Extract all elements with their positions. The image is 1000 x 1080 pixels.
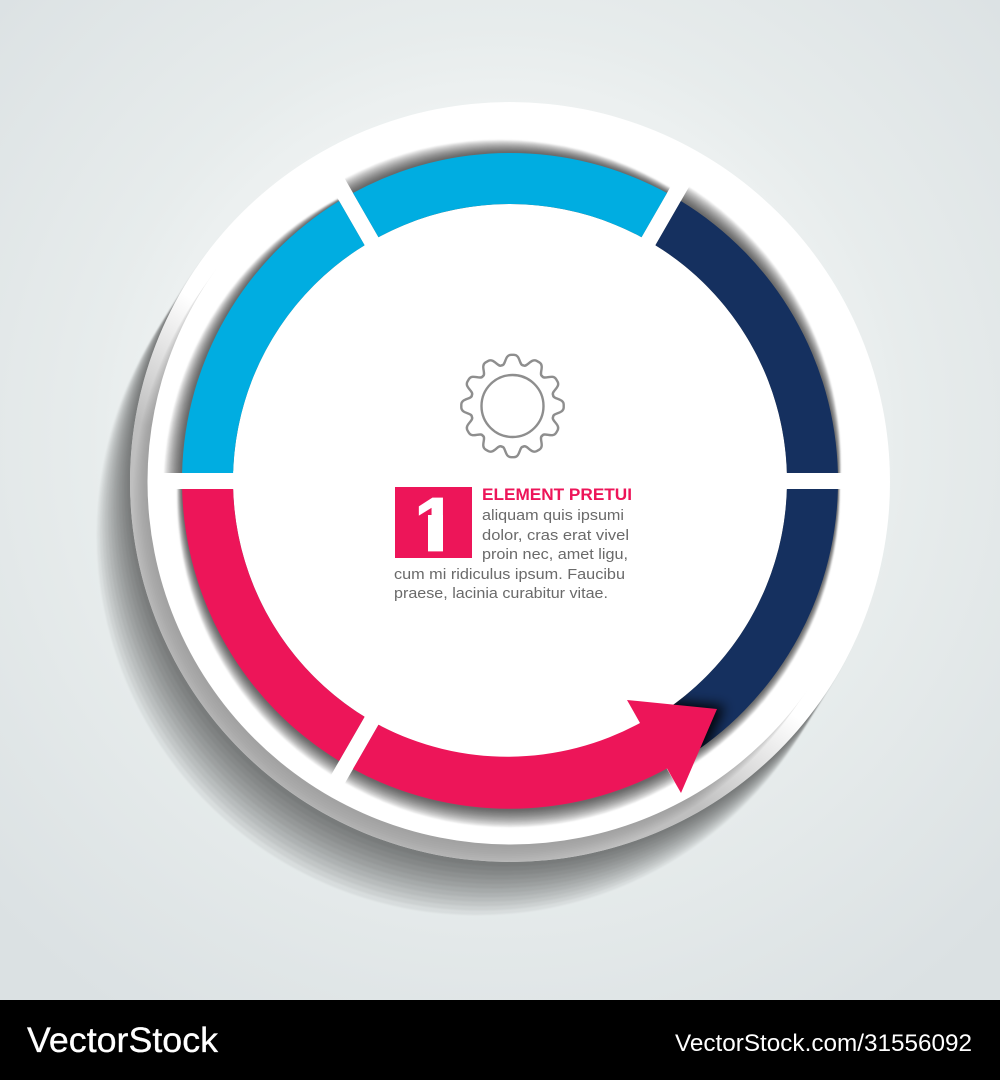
segment shadow: lower left xyxy=(176,489,364,774)
footer logo: VectorStock xyxy=(27,1021,219,1060)
arrow segment: bottom red xyxy=(353,700,717,809)
text block: cum mi ridiculus ipsum. Faucibu xyxy=(394,566,625,583)
arrow shadow on navy xyxy=(674,694,730,748)
text block: proin nec, amet ligu, xyxy=(482,546,628,563)
text block: aliquam quis ipsumi xyxy=(482,507,624,524)
segment shadow: upper right xyxy=(656,187,842,473)
segment: upper left blue xyxy=(182,201,365,473)
crescent shadow on base disc xyxy=(130,281,800,862)
icon: gear xyxy=(461,355,564,457)
segment: lower right navy xyxy=(655,489,838,761)
heading: ELEMENT PRETUI xyxy=(482,485,632,504)
number badge: 1 xyxy=(414,482,457,568)
segment: lower left red xyxy=(182,489,365,761)
footer url: VectorStock.com/31556092 xyxy=(675,1030,972,1057)
segment shadow: top xyxy=(345,140,670,238)
white base disc xyxy=(130,102,890,862)
text block: dolor, cras erat vivel xyxy=(482,527,629,544)
segment shadow: lower right xyxy=(673,489,840,764)
footer bar xyxy=(0,1000,1000,1080)
text block: praese, lacinia curabitur vitae. xyxy=(394,585,608,602)
text block xyxy=(394,507,629,602)
segment: top blue xyxy=(353,153,667,237)
segment shadow: upper left xyxy=(164,198,364,473)
segment shadow: bottom xyxy=(346,724,674,828)
segment: upper right navy xyxy=(655,201,838,473)
inner white circle xyxy=(233,204,787,758)
number badge xyxy=(395,482,472,568)
upper white disc xyxy=(148,118,874,844)
outer drop shadow on background xyxy=(97,106,887,915)
